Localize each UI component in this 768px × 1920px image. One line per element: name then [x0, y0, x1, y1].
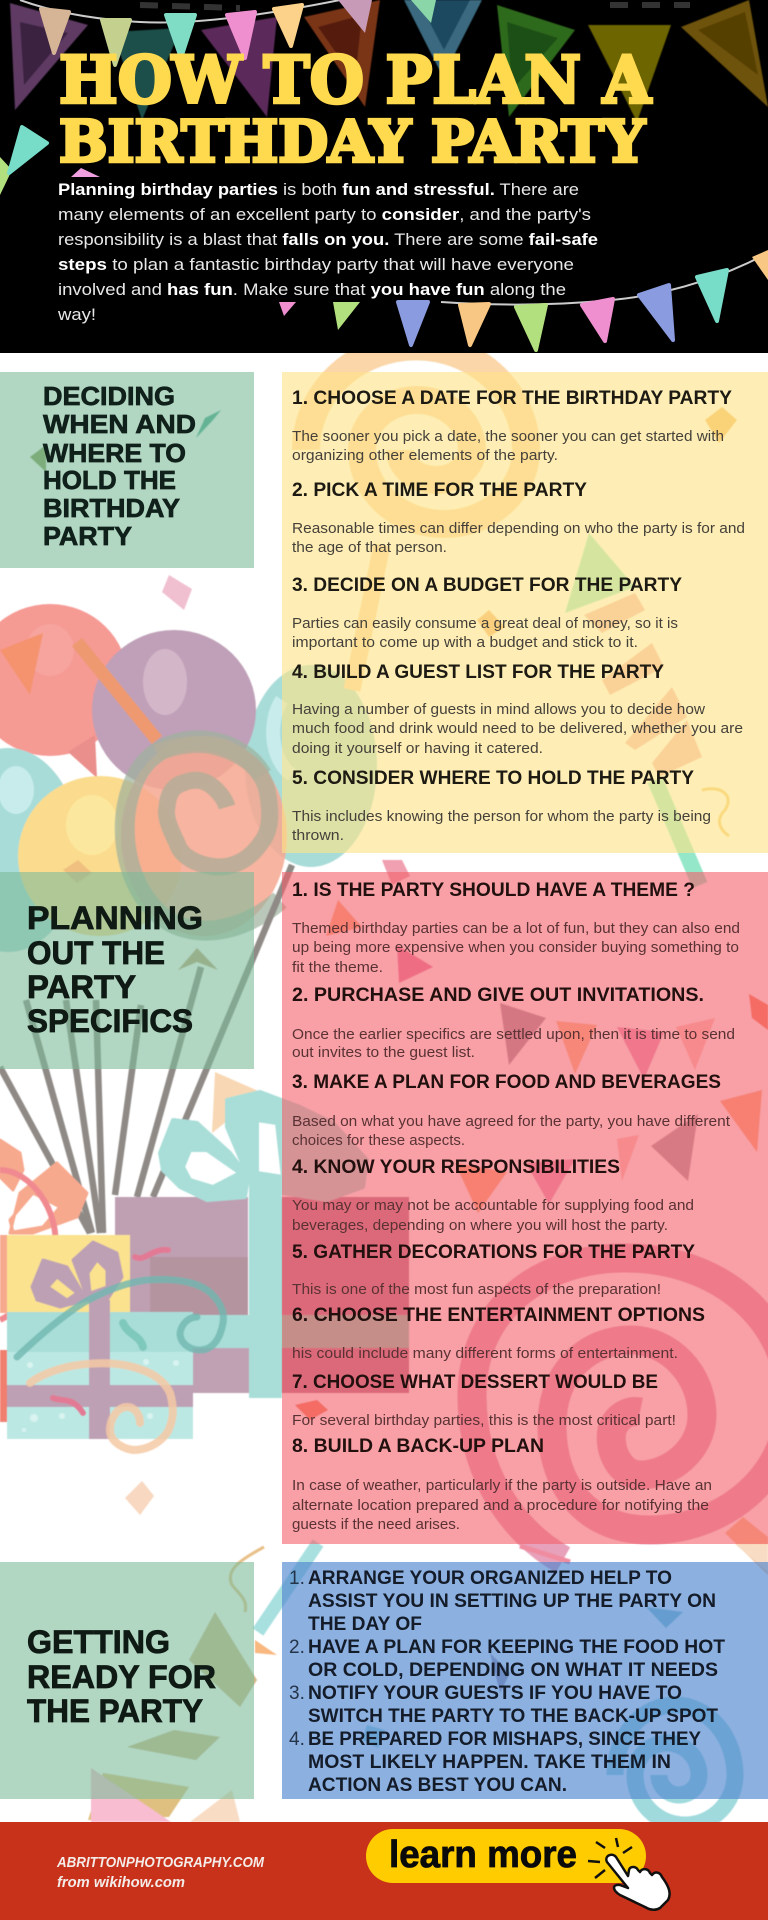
panel: deciding steps: The sooner you pick a date, the sooner you can get started with	[292, 428, 724, 445]
panel: getting ready list: HAVE A PLAN FOR KEEPING THE FOOD HOT	[308, 1637, 725, 1658]
panel: planning heading: OUT THE	[27, 935, 165, 971]
orange kite on yellow balloon	[63, 860, 92, 883]
gift: teal box	[7, 1312, 193, 1352]
salmon ribbon strip	[0, 1235, 8, 1313]
panel: deciding steps: 2. PICK A TIME FOR THE PARTY	[292, 480, 587, 501]
panel: deciding steps: thrown.	[292, 827, 344, 844]
panel: planning steps: beverages, depending on where you will host the party.	[292, 1217, 668, 1234]
intro paragraph: many elements of an excellent party to consider , and the party's	[58, 205, 591, 224]
gift: salmon bow	[0, 1140, 87, 1233]
panel: planning steps: up being more expensive when you consider buying something to	[292, 939, 739, 956]
panel: getting ready heading: THE PARTY	[27, 1693, 203, 1729]
panel: planning steps: alternate location prepared and a procedure for notifying the	[292, 1497, 709, 1514]
intro paragraph: way!	[57, 305, 96, 324]
panel: getting ready heading	[0, 1562, 254, 1799]
gift: teal band	[192, 1315, 252, 1348]
panel: getting ready list: SWITCH THE PARTY TO THE BACK-UP SPOT	[308, 1706, 718, 1727]
panel: deciding steps: 3. DECIDE ON A BUDGET FOR THE PARTY	[292, 575, 682, 596]
intro paragraph: responsibility is a blast that falls on you. There are some fail-safe	[58, 230, 598, 249]
panel: deciding steps: important to come up with a budget and stick to it.	[292, 634, 638, 651]
panel: deciding steps: doing it yourself or having it catered.	[292, 740, 543, 757]
gift: teal ribbon	[249, 1177, 282, 1398]
panel: footer	[0, 1822, 768, 1920]
panel: planning steps: choices for these aspects.	[292, 1132, 465, 1149]
balloon: teal back	[245, 665, 377, 867]
gift: teal bow	[160, 1092, 367, 1200]
panel: getting ready list: 2.	[289, 1637, 305, 1658]
intro paragraph: Planning birthday parties is both fun and stressful. There are	[58, 180, 579, 199]
panel: deciding heading: DECIDING	[43, 381, 175, 411]
panel: planning steps: For several birthday parties, this is the most critical part!	[292, 1412, 676, 1429]
large yellow panel spiral	[306, 346, 526, 524]
large dim pennants	[10, 0, 768, 122]
panel: deciding heading: HOLD THE	[43, 465, 176, 495]
panel: planning steps: guests if the need arises.	[292, 1516, 460, 1533]
gift box seen through red panel	[282, 1197, 409, 1393]
party blower in yellow panel	[565, 533, 729, 885]
panel: deciding steps	[282, 372, 768, 853]
panel: planning steps: Themed birthday parties can be a lot of fun, but they can also end	[292, 920, 740, 937]
pink ribbon curl	[0, 1170, 56, 1320]
swirl ribbons	[17, 1250, 223, 1450]
spiral stick	[352, 545, 382, 690]
footer credit	[56, 1854, 264, 1891]
swirl candy	[121, 736, 287, 936]
panel: planning heading: PARTY	[27, 969, 136, 1005]
gift: purple ribbon vertical	[89, 1300, 110, 1439]
gift: yellow box	[7, 1235, 130, 1312]
balloon knot	[178, 948, 218, 970]
yellow balloon highlight	[66, 795, 118, 855]
panel: deciding steps: Reasonable times can differ depending on who the party is for and	[292, 520, 745, 537]
gift: purple box shaded band	[150, 1257, 248, 1315]
panel: deciding steps: the age of that person.	[292, 539, 447, 556]
panel: deciding heading: PARTY	[43, 521, 132, 551]
panel: getting ready list: 4.	[289, 1729, 305, 1750]
panel: deciding heading: BIRTHDAY	[43, 493, 180, 523]
salmon lower strip	[0, 1350, 9, 1422]
intro paragraph	[57, 180, 598, 324]
panel: planning steps: 5. GATHER DECORATIONS FOR THE PARTY	[292, 1242, 695, 1263]
bottom chalk bunting	[279, 250, 768, 350]
intro paragraph: involved and has fun . Make sure that you have fun along the	[58, 280, 566, 299]
panel: getting ready list: NOTIFY YOUR GUESTS IF YOU HAVE TO	[308, 1683, 682, 1704]
panel: deciding heading: WHERE TO	[43, 438, 186, 468]
icon: click rays	[588, 1838, 632, 1878]
panel: getting ready list: MOST LIKELY HAPPEN. TAKE THEM IN	[308, 1752, 671, 1773]
purple balloon highlight	[143, 649, 187, 715]
panel: planning steps: In case of weather, particularly if the party is outside. Have an	[292, 1477, 712, 1494]
panel: planning steps: 2. PURCHASE AND GIVE OUT INVITATIONS.	[292, 985, 704, 1006]
gift dots	[22, 1359, 179, 1432]
gift: purple ribbon horizontal	[7, 1385, 193, 1407]
panel: planning steps: fit the theme.	[292, 959, 383, 976]
panel: getting ready list: BE PREPARED FOR MISHAPS, SINCE THEY	[308, 1729, 701, 1750]
panel: getting ready heading: GETTING	[27, 1624, 170, 1660]
panel: getting ready list: ASSIST YOU IN SETTING UP THE PARTY ON	[308, 1591, 716, 1612]
panel: deciding steps: 4. BUILD A GUEST LIST FOR THE PARTY	[292, 662, 664, 683]
panel: deciding heading: WHEN AND	[43, 409, 196, 439]
panel: deciding heading	[0, 372, 254, 568]
panel: getting ready list: ARRANGE YOUR ORGANIZED HELP TO	[308, 1568, 672, 1589]
panel: getting ready list: THE DAY OF	[308, 1614, 422, 1635]
panel: planning steps	[282, 872, 768, 1544]
top chalk bunting	[0, 0, 436, 195]
balloon: purple	[92, 630, 256, 790]
teal balloon highlight	[273, 700, 292, 775]
panel: deciding steps: 1. CHOOSE A DATE FOR THE BIRTHDAY PARTY	[292, 388, 732, 409]
panel: planning steps: 4. KNOW YOUR RESPONSIBILITIES	[292, 1157, 620, 1178]
background art: balloons, gifts and streamers	[0, 346, 768, 1825]
blue spiral	[615, 1705, 735, 1825]
panel: planning steps: 3. MAKE A PLAN FOR FOOD AND BEVERAGES	[292, 1072, 721, 1093]
balloon: yellow	[18, 776, 182, 936]
title: BIRTHDAY PARTY	[59, 108, 646, 176]
balloon stick: orange	[77, 642, 157, 740]
panel: getting ready list: 3.	[289, 1683, 305, 1704]
panel: planning heading: PLANNING	[27, 900, 203, 936]
gift: purple lower box	[193, 1348, 249, 1393]
panel: header	[0, 0, 768, 353]
learn more button	[366, 1829, 646, 1883]
panel: deciding steps: 5. CONSIDER WHERE TO HOLD THE PARTY	[292, 768, 694, 789]
panel: planning steps: out invites to the guest list.	[292, 1044, 475, 1061]
light blue highlight	[0, 766, 34, 814]
balloon: red	[0, 604, 128, 756]
panel: planning steps: Based on what you have agreed for the party, you have different	[292, 1113, 731, 1130]
panel: deciding steps: Having a number of guests in mind allows you to decide how	[292, 701, 705, 718]
learn more button: learn more	[389, 1834, 577, 1876]
gift: teal box lower band	[7, 1352, 193, 1439]
confetti kites	[30, 407, 737, 1515]
panel: getting ready list: OR COLD, DEPENDING ON WHAT IT NEEDS	[308, 1660, 718, 1681]
title	[59, 42, 652, 176]
big pink spiral	[472, 1258, 768, 1560]
panel: planning steps: his could include many different forms of entertainment.	[292, 1345, 678, 1362]
panel: getting ready list: 1.	[289, 1568, 305, 1589]
balloon: light blue	[0, 748, 80, 952]
panel: planning heading	[0, 872, 254, 1069]
panel: getting ready list: ACTION AS BEST YOU CAN.	[308, 1775, 567, 1796]
panel: planning steps: 1. IS THE PARTY SHOULD HAVE A THEME ?	[292, 880, 695, 901]
panel: planning steps: 8. BUILD A BACK-UP PLAN	[292, 1436, 544, 1457]
panel: planning steps: Once the earlier specifics are settled upon, then it is time to send	[292, 1026, 735, 1043]
panel: planning steps: 7. CHOOSE WHAT DESSERT WOULD BE	[292, 1372, 658, 1393]
pennants behind red panel	[326, 860, 768, 1575]
gift: purple bow	[32, 1242, 122, 1307]
footer credit: ABRITTONPHOTOGRAPHY.COM	[56, 1854, 264, 1871]
panel: deciding steps: organizing other elements of the party.	[292, 447, 558, 464]
gift: purple back box	[115, 1197, 248, 1315]
panel: planning steps: You may or may not be accountable for supplying food and	[292, 1197, 694, 1214]
panel: getting ready heading: READY FOR	[27, 1659, 216, 1695]
orange pennant on balloon	[0, 633, 43, 695]
panel: planning steps: 6. CHOOSE THE ENTERTAINMENT OPTIONS	[292, 1305, 705, 1326]
red balloon highlight	[26, 624, 74, 676]
panel: planning steps: This is one of the most fun aspects of the preparation!	[292, 1281, 661, 1298]
panel: getting ready list	[282, 1562, 768, 1799]
panel: deciding steps: much food and drink would need to be delivered, whether you are	[292, 720, 743, 737]
intro paragraph: steps to plan a fantastic birthday party that will have everyone	[58, 255, 574, 274]
panel: deciding steps: This includes knowing the person for whom the party is being	[292, 808, 711, 825]
bunting dashes	[140, 5, 690, 8]
title: HOW TO PLAN A	[59, 42, 652, 118]
panel: planning heading: SPECIFICS	[27, 1003, 193, 1039]
red balloon knot	[68, 735, 97, 778]
balloon strings	[0, 865, 292, 1233]
bottom streamer	[88, 1543, 768, 1822]
icon: pointing hand	[606, 1855, 670, 1910]
footer credit: from wikihow.com	[57, 1874, 185, 1891]
panel: deciding steps: Parties can easily consume a great deal of money, so it is	[292, 615, 678, 632]
